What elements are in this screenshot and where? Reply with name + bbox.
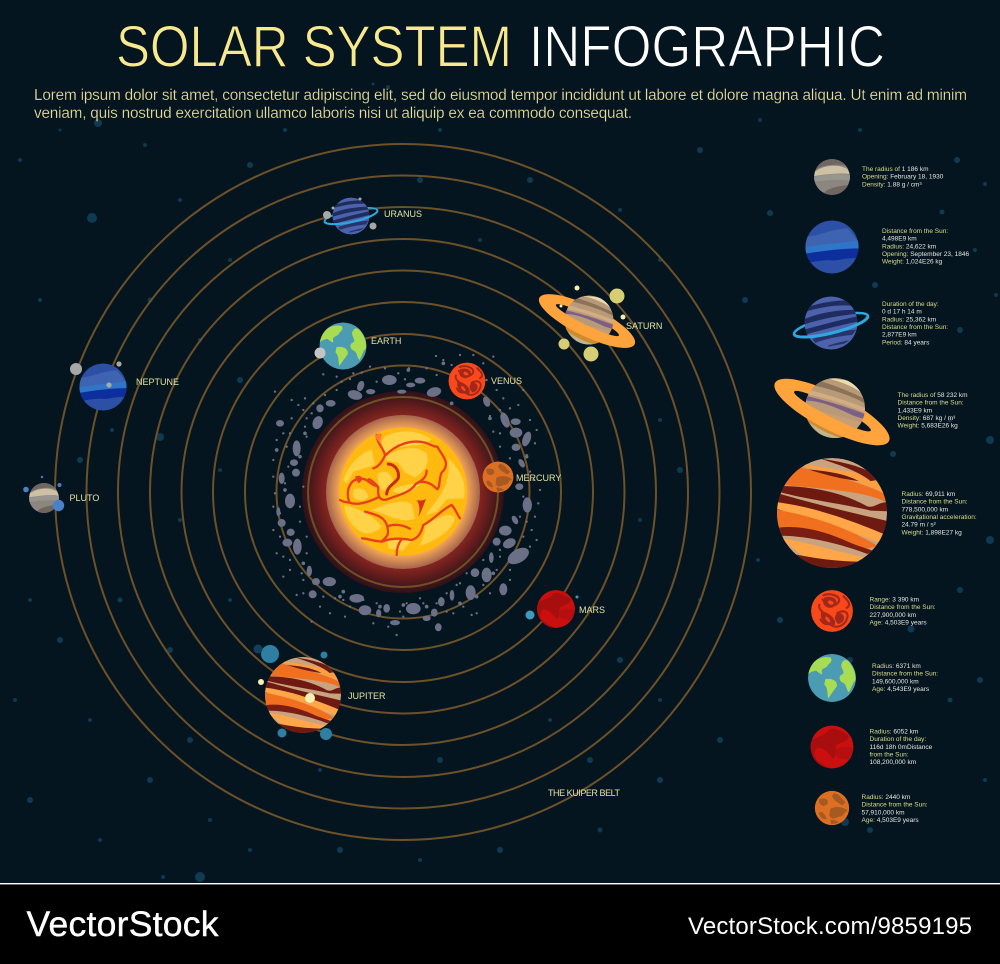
info: mercury: Age: 4,503E9 years [862,817,919,824]
info: earth: Radius: 6371 km [872,663,921,670]
planet: uranus [320,189,422,243]
info: saturn [759,343,968,473]
info: earth [808,654,938,702]
info: uranus: Distance from the Sun: [882,324,948,331]
info: saturn: Weight: 5,683E26 kg [898,423,958,430]
planet: mercury: MERCURY [516,473,561,483]
planet: venus [448,362,522,400]
planet: pluto [23,476,99,513]
planet: mars: MARS [579,605,605,615]
info: jupiter [777,458,977,572]
planet: earth: EARTH [371,336,401,346]
info: uranus: 0 d 17 h 14 m [882,309,922,316]
planet: pluto: PLUTO [70,493,99,503]
info: jupiter: 778,500,000 km [902,506,948,513]
title: SOLAR SYSTEM [116,13,512,79]
planet: mars [526,590,605,628]
info: venus: 108,200,000 km [870,759,916,766]
footer bar [0,883,1000,964]
planet: mercury [482,462,561,492]
sun [339,428,467,556]
info: jupiter: Radius: 69,911 km [902,491,955,498]
info: mars: Distance from the Sun: [870,604,936,611]
info: jupiter: Distance from the Sun: [902,499,968,506]
footer bar: VectorStock [26,904,219,944]
planet: saturn: SATURN [626,321,662,331]
info: mars: Range: 3 390 km [870,596,919,604]
info: mercury: Radius: 2440 km [862,794,910,801]
info: neptune: 4,498E9 km [882,236,917,243]
info: neptune [806,220,969,274]
info: neptune: Radius: 24,622 km [882,243,936,250]
info: pluto: Opening: February 18, 1930 [862,174,944,181]
sun glow [302,391,504,593]
info: uranus: Period: 84 years [882,339,930,346]
info: earth: 149,600,000 km [872,678,919,685]
info: uranus: Duration of the day: [882,301,939,308]
title [116,13,885,79]
intro paragraph: Lorem ipsum dolor sit amet, consectetur adipiscing elit, sed do eiusmod tempor incididunt ut labore et dolore magna aliqua. Ut enim ad minim [34,87,967,104]
kuiper belt label: THE KUIPER BELT [548,788,620,798]
info: neptune: Weight: 1,024E26 kg [882,259,943,266]
info: neptune: Opening: September 23, 1846 [882,251,969,258]
intro paragraph: veniam, quis nostrud exercitation ullamco laboris nisi ut aliquip ex ea commodo consequat. [34,105,632,122]
info: jupiter: Gravitational acceleration: [902,514,977,521]
info: saturn: Density: 687 kg / m³ [898,415,956,422]
info: uranus [786,283,948,363]
info: venus: from the Sun: [870,752,909,758]
intro paragraph [34,87,967,122]
info: mars: 227,900,000 km [870,612,916,619]
planet: neptune [70,361,179,410]
footer bar: VectorStock.com/9859195 [688,913,972,940]
asteroid belt [273,355,540,635]
orbits [55,144,751,840]
planet: saturn [526,267,662,372]
info: pluto [814,159,944,195]
info: pluto: The radius of 1 186 km [862,166,928,173]
info: saturn: 1,433E9 km [898,407,932,414]
info: uranus: Radius: 25,362 km [882,316,936,323]
planet: earth [314,322,401,370]
info: venus: Radius: 6052 km [870,728,918,736]
info: earth: Distance from the Sun: [872,671,938,678]
info: jupiter: Weight: 1,898E27 kg [902,529,962,536]
info: mercury: 57,910,000 km [862,809,905,816]
info: mercury [815,791,928,825]
info: mars [811,590,936,632]
planet: uranus: URANUS [384,209,422,219]
info: pluto: Density: 1.88 g / cm³ [862,181,922,188]
info: saturn: Distance from the Sun: [898,400,964,407]
info: venus [810,726,933,768]
info: mercury: Distance from the Sun: [862,802,928,809]
info: mars: Age: 4,503E9 years [870,619,927,626]
info: jupiter: 24.79 m / s² [902,522,937,529]
info: uranus: 2,877E9 km [882,332,917,339]
info: earth: Age: 4,543E9 years [872,686,930,693]
planet: venus: VENUS [491,376,522,386]
planet: jupiter: JUPITER [348,691,386,701]
planet: jupiter [254,644,386,740]
info: saturn: The radius of 58 232 km [898,392,968,399]
planet: neptune: NEPTUNE [136,377,179,387]
info: venus: Duration of the day: [870,736,926,743]
title: INFOGRAPHIC [529,13,885,79]
info: venus: 116d 18h 0mDistance [870,744,933,751]
info: neptune: Distance from the Sun: [882,228,948,235]
